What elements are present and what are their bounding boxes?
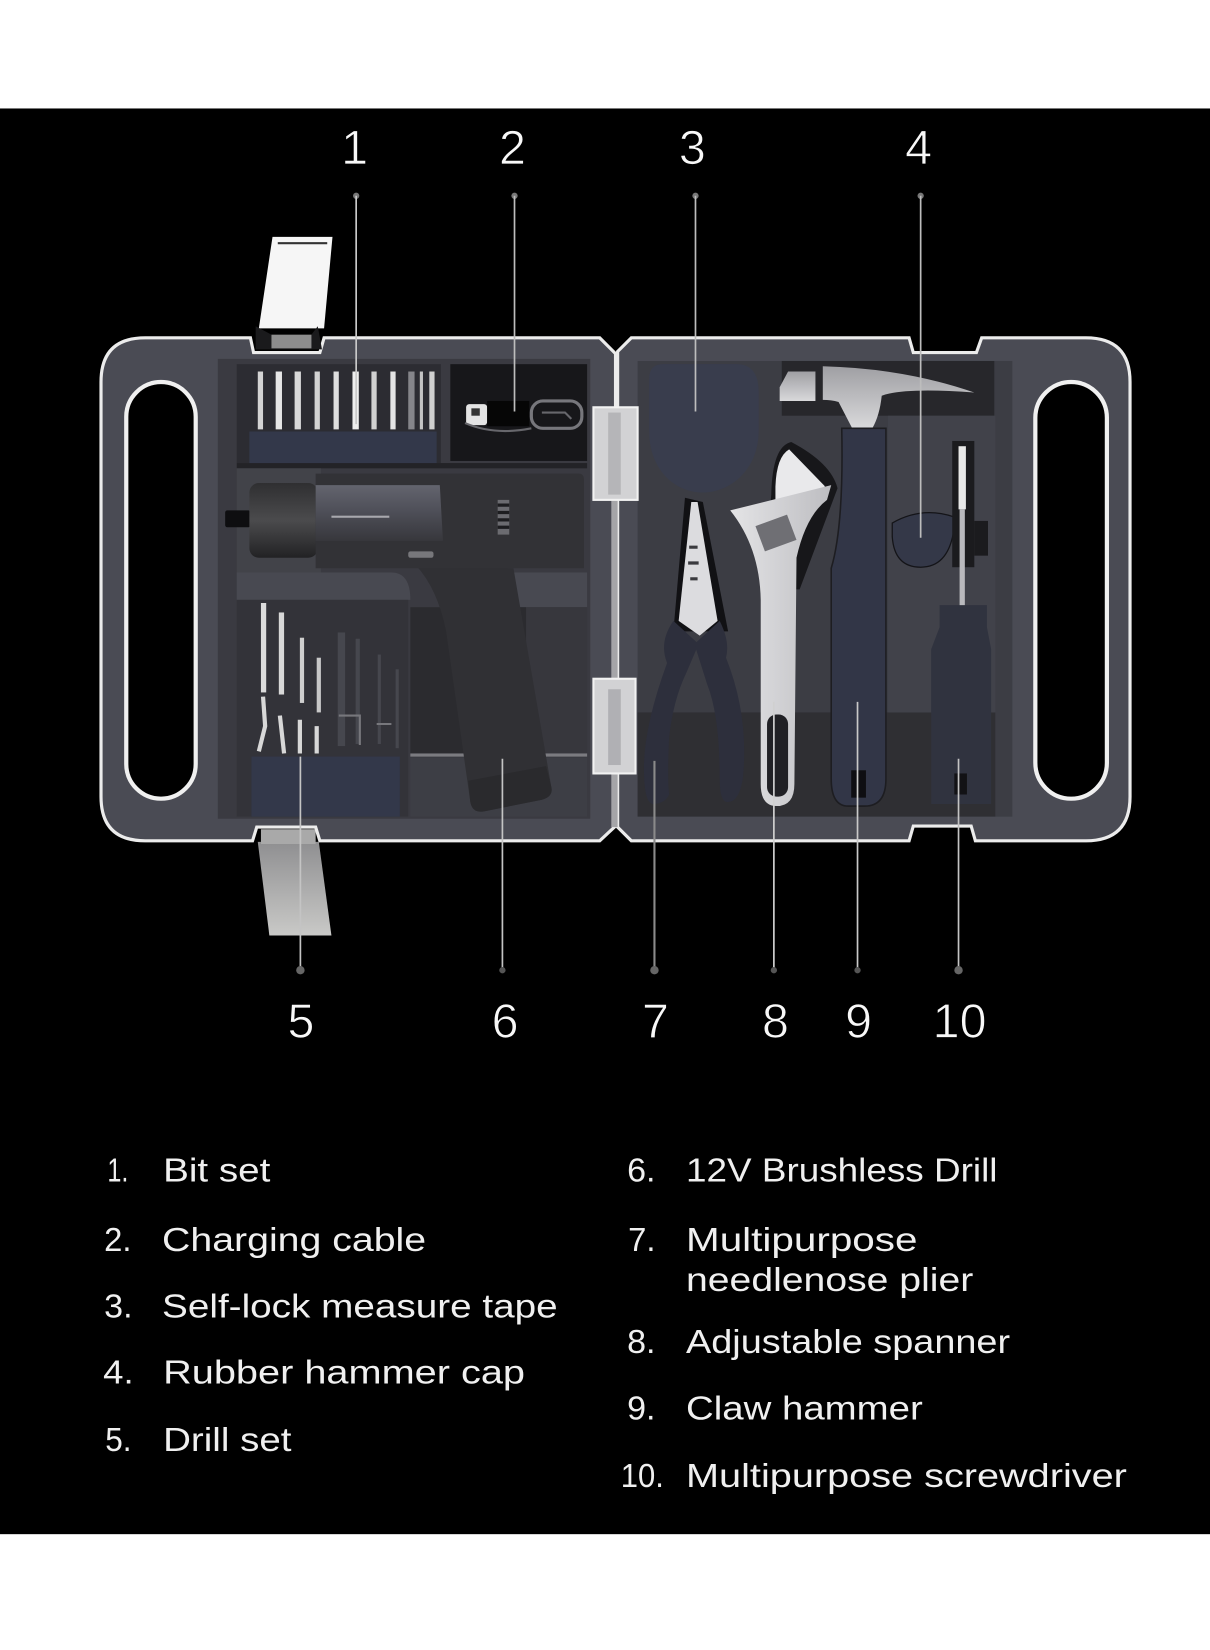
- self-lock measure tape: [649, 364, 759, 493]
- leader line 3: [692, 193, 699, 411]
- parts list: left column: Charging cable: [162, 1222, 426, 1259]
- leader line 8: [771, 702, 777, 973]
- leader line 5: [296, 757, 305, 974]
- bottom callout numbers: [287, 995, 986, 1049]
- leader line 2: [511, 193, 518, 411]
- bottom callout numbers: 9: [845, 995, 872, 1049]
- leader line 1: [353, 193, 359, 424]
- parts list: left column: Self-lock measure tape: [162, 1288, 558, 1325]
- parts list: left column: 4.: [103, 1355, 134, 1392]
- parts list: left column: 2.: [104, 1222, 132, 1259]
- parts list: right column: Claw hammer: [686, 1390, 923, 1427]
- parts list: left column: Rubber hammer cap: [163, 1355, 525, 1392]
- bottom callout numbers: 8: [762, 995, 789, 1049]
- adjustable spanner: [730, 442, 838, 806]
- drill body: [316, 474, 584, 568]
- hinge rod: [611, 500, 618, 679]
- bit set compartment: [237, 364, 441, 463]
- right recess: [638, 361, 1012, 817]
- right handle cutout: [1035, 382, 1107, 799]
- top callout numbers: 2: [499, 121, 526, 175]
- parts list: right column: 10.: [621, 1458, 664, 1495]
- parts list: left column: Drill set: [163, 1422, 292, 1459]
- top callout numbers: 3: [679, 121, 706, 175]
- parts list: right column: 7.: [628, 1222, 656, 1259]
- drill set compartment: [237, 600, 408, 817]
- drill chuck: [249, 483, 318, 558]
- drill band: [316, 485, 443, 541]
- chuck foam: [237, 468, 321, 574]
- hammer handle: [831, 428, 886, 806]
- spanner head and handle: [730, 485, 831, 806]
- latch clip: bottom: [258, 829, 331, 935]
- parts list: left column: 5.: [105, 1422, 132, 1459]
- parts list: left column: Bit set: [163, 1153, 271, 1190]
- parts list: right column: 6.: [627, 1153, 656, 1190]
- rubber hammer cap: [892, 513, 953, 567]
- leader line 10: [954, 759, 963, 974]
- charging cable: [465, 401, 582, 431]
- hammer head: [780, 372, 815, 401]
- hinge: upper: [593, 407, 638, 500]
- parts list: right column: 12V Brushless Drill: [686, 1153, 997, 1190]
- cable compartment: [450, 364, 587, 461]
- drill foam band: [237, 572, 410, 600]
- parts list: left column: [103, 1153, 558, 1459]
- parts list: right column: 8.: [627, 1324, 656, 1361]
- parts list: right column: Adjustable spanner: [686, 1324, 1010, 1361]
- 12V brushless drill: [225, 474, 584, 812]
- top callout numbers: 1: [341, 121, 368, 175]
- right case half: [618, 338, 1130, 841]
- drill trigger: [408, 551, 433, 558]
- parts list: right column: [621, 1153, 1127, 1495]
- bottom callout numbers: 10: [933, 995, 986, 1049]
- drill nose: [225, 510, 250, 527]
- parts list: right column: needlenose plier: [686, 1262, 973, 1299]
- spanner jaw: [775, 449, 825, 503]
- divider below compartments: [237, 463, 587, 468]
- hinge: lower: [593, 679, 636, 773]
- top callout numbers: [341, 121, 932, 175]
- spanner worm gear: [755, 515, 796, 551]
- multipurpose screwdriver: [931, 441, 991, 804]
- top callout numbers: 4: [905, 121, 932, 175]
- bit set: [249, 372, 437, 463]
- parts list: right column: 9.: [627, 1390, 656, 1427]
- leader line 6: [499, 759, 506, 973]
- leader line 7: [650, 761, 659, 974]
- leader line 4: [917, 193, 924, 538]
- bottom callout numbers: 5: [287, 995, 314, 1049]
- latch clip: top: [259, 237, 332, 328]
- spanner shadow: [763, 442, 838, 589]
- bottom callout numbers: 7: [642, 995, 669, 1049]
- claw hammer: [780, 366, 974, 806]
- plier handles: [644, 621, 699, 804]
- spanner handle hole: [767, 715, 788, 797]
- left handle cutout: [126, 382, 196, 799]
- top latch seat: [256, 326, 322, 349]
- drill set: [251, 603, 400, 817]
- bottom callout numbers: 6: [492, 995, 519, 1049]
- leader line 9: [854, 702, 861, 973]
- parts list: left column: 1.: [107, 1153, 128, 1190]
- drill vents: [498, 500, 509, 535]
- screwdriver handle: [931, 605, 991, 804]
- screwdriver shaft: [959, 446, 966, 509]
- parts list: left column: 3.: [104, 1288, 133, 1325]
- parts list: right column: Multipurpose screwdriver: [686, 1458, 1127, 1495]
- left recess: [218, 359, 590, 819]
- parts list: right column: Multipurpose: [686, 1222, 917, 1259]
- left case half: [101, 326, 616, 841]
- drill handle: [417, 566, 552, 812]
- multipurpose needlenose plier: [644, 498, 744, 804]
